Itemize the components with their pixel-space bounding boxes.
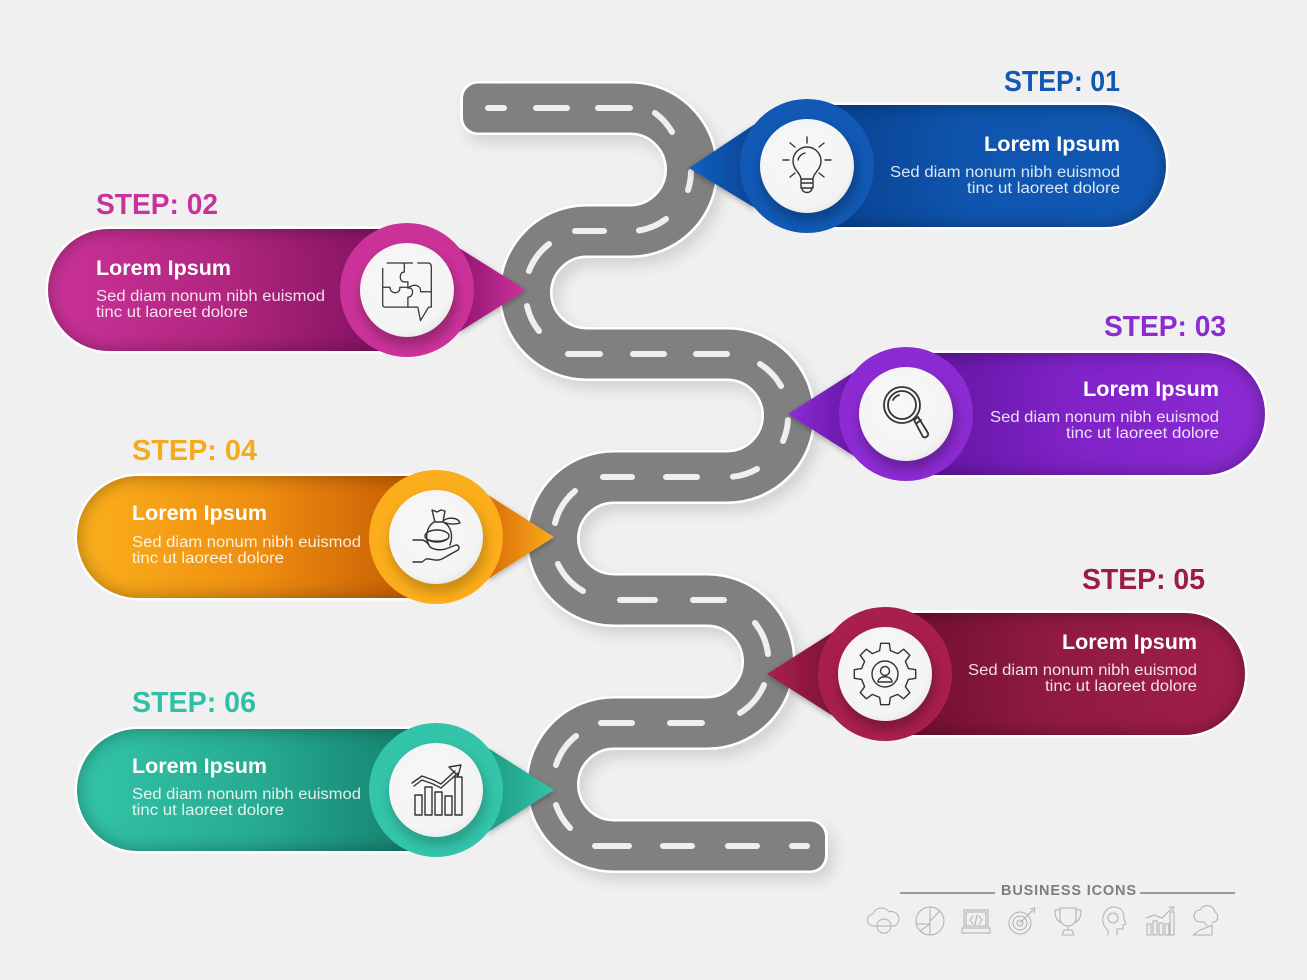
step 06 description: Sed diam nonum nibh euismod xyxy=(132,786,361,803)
step 04 description: Sed diam nonum nibh euismod xyxy=(132,534,361,551)
step 02 pin with puzzle icon xyxy=(340,223,526,357)
step 02 description xyxy=(96,288,325,321)
icon: trophy xyxy=(1055,908,1081,935)
step 06 pin with growth chart icon xyxy=(369,723,554,857)
step 06 description: tinc ut laoreet dolore xyxy=(132,802,284,819)
step 03 heading: Lorem Ipsum xyxy=(1083,378,1219,401)
step 01 pill xyxy=(807,105,1166,227)
icon: bar chart with arrow xyxy=(412,765,462,815)
step 05 description xyxy=(968,662,1197,695)
step 03 pin with magnifier icon xyxy=(788,347,973,481)
business icons footer xyxy=(867,883,1235,935)
icon: hand holding money bag xyxy=(413,510,460,562)
step 05 label: STEP: 05 xyxy=(1082,564,1205,596)
icon: puzzle speech bubble xyxy=(383,263,431,321)
step 06 heading: Lorem Ipsum xyxy=(132,755,267,778)
step 03 pill xyxy=(906,353,1265,475)
step 01 description: tinc ut laoreet dolore xyxy=(967,180,1120,197)
step 02 label: STEP: 02 xyxy=(96,189,218,221)
winding road xyxy=(460,81,828,873)
step 02 panel xyxy=(48,189,526,357)
step 01 panel xyxy=(689,66,1166,233)
step 01 pin with lightbulb icon xyxy=(689,99,874,233)
icon: cloud support xyxy=(867,908,899,933)
step 01 heading: Lorem Ipsum xyxy=(984,133,1120,156)
step 03 description: tinc ut laoreet dolore xyxy=(1066,425,1219,442)
step 05 pill xyxy=(885,613,1245,735)
step 04 description: tinc ut laoreet dolore xyxy=(132,550,284,567)
icon: magnifying glass xyxy=(884,387,928,437)
step 02 description: Sed diam nonum nibh euismod xyxy=(96,288,325,305)
step 05 description: Sed diam nonum nibh euismod xyxy=(968,662,1197,679)
step 04 label: STEP: 04 xyxy=(132,435,257,467)
icon: head with gear xyxy=(1103,907,1126,935)
step 02 description: tinc ut laoreet dolore xyxy=(96,304,248,321)
step 05 description: tinc ut laoreet dolore xyxy=(1045,678,1197,695)
step 03 description xyxy=(990,409,1219,442)
icon: lightbulb xyxy=(783,137,831,192)
step 04 pin with money bag icon xyxy=(369,470,554,604)
step 05 panel xyxy=(767,564,1245,741)
road lane dashes xyxy=(488,108,807,846)
icon: target xyxy=(1009,908,1035,934)
step 01 description: Sed diam nonum nibh euismod xyxy=(890,164,1120,181)
step 03 panel xyxy=(788,311,1265,481)
icon: code laptop xyxy=(962,910,990,933)
step 04 panel xyxy=(77,435,554,604)
icon: growth chart xyxy=(1146,907,1174,935)
step 05 pin with gear icon xyxy=(767,607,952,741)
step 06 label: STEP: 06 xyxy=(132,687,256,719)
step 02 heading: Lorem Ipsum xyxy=(96,257,231,280)
icon: cloud with steps xyxy=(1193,906,1218,935)
step 06 description xyxy=(132,786,361,819)
step 04 pill xyxy=(77,476,436,598)
step 06 pill xyxy=(77,729,436,851)
step 04 heading: Lorem Ipsum xyxy=(132,502,267,525)
step 01 label: STEP: 01 xyxy=(1004,66,1120,98)
icon: pie chart xyxy=(916,907,944,935)
icon: gear with person xyxy=(854,643,916,705)
step 03 description: Sed diam nonum nibh euismod xyxy=(990,409,1219,426)
step 06 panel xyxy=(77,687,554,857)
step 03 label: STEP: 03 xyxy=(1104,311,1226,343)
step 04 description xyxy=(132,534,361,567)
footer heading: BUSINESS ICONS xyxy=(1001,883,1136,899)
step 01 description xyxy=(890,164,1120,197)
step 02 pill xyxy=(48,229,407,351)
step 05 heading: Lorem Ipsum xyxy=(1062,631,1197,654)
